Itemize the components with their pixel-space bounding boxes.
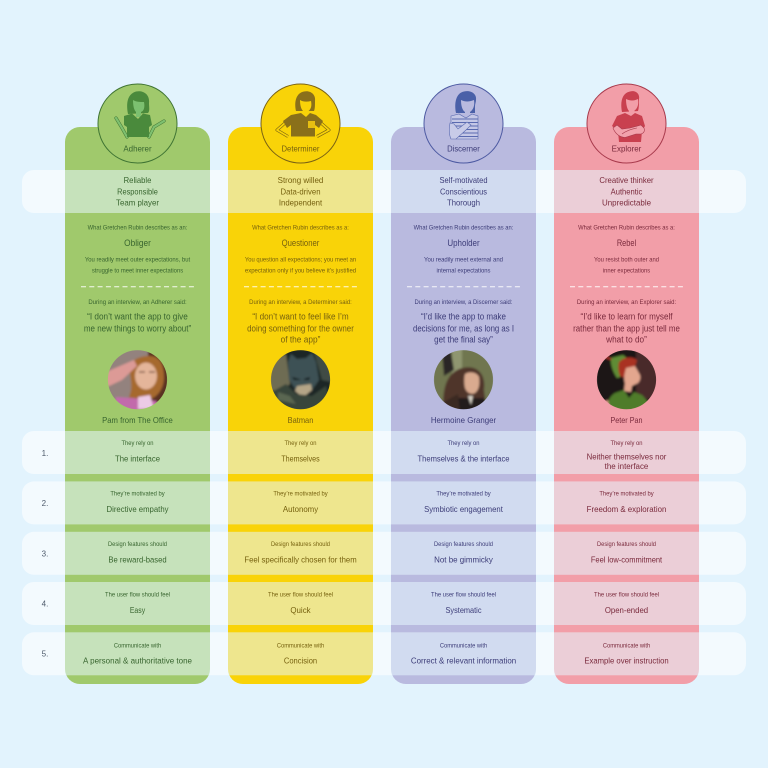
label: Hermoine Granger: Hermoine Granger <box>431 415 496 425</box>
row 1 text: the interface <box>605 461 649 471</box>
traits: Self-motivated <box>440 175 488 185</box>
photo: Hermione Granger <box>433 349 494 412</box>
row 5 text: A personal & authoritative tone <box>83 656 192 666</box>
lighter rows <box>391 170 536 675</box>
row 1 text: The interface <box>115 453 160 463</box>
row 1 text: They rely on <box>122 441 154 447</box>
interview quote <box>84 300 191 333</box>
traits <box>278 175 324 208</box>
tendency description: Rebel <box>617 238 636 248</box>
row 4 text <box>105 593 170 615</box>
row 5 text: Correct & relevant information <box>411 656 516 666</box>
row 1 text: Neither themselves nor <box>587 451 666 461</box>
interview quote: what to do” <box>605 335 647 345</box>
horizontal bands behind the columns <box>22 170 746 675</box>
traits: Independent <box>279 198 323 208</box>
panel: Explorer <box>554 84 699 684</box>
row 4 text: The user flow should feel <box>268 593 333 599</box>
icon: Determiner hands on hips figure in circle <box>261 84 340 163</box>
panel: Discerner <box>391 84 536 684</box>
row 2 text: They’re motivated by <box>436 492 491 498</box>
tendency description: Questioner <box>282 238 319 248</box>
label: Peter Pan: Peter Pan <box>610 415 643 425</box>
row 4 text: The user flow should feel <box>431 593 496 599</box>
row 2 text: They’re motivated by <box>110 492 165 498</box>
tendency description: What Gretchen Rubin describes as a: <box>578 226 675 232</box>
tendency description: Obliger <box>124 238 151 248</box>
row 4 text <box>594 593 659 615</box>
column background <box>554 127 699 684</box>
row 4 text: Open-ended <box>605 605 648 615</box>
interview quote: doing something for the owner <box>247 323 354 333</box>
row 2 text <box>273 492 328 514</box>
column background <box>228 127 373 684</box>
traits: Data-driven <box>280 186 321 196</box>
tendency description: What Gretchen Rubin describes as a: <box>252 226 349 232</box>
tendency description: You readily meet external and <box>424 257 503 263</box>
row 3 text: Design features should <box>434 542 493 548</box>
row 1 text: Themselves & the interface <box>418 453 510 463</box>
interview quote: get the final say” <box>434 335 493 345</box>
row 3 text <box>244 542 357 564</box>
row numbers <box>42 449 48 659</box>
interview quote: During an interview, an Adherer said: <box>88 300 187 306</box>
row 5 text <box>83 643 192 666</box>
photo: Peter Pan <box>596 350 656 410</box>
row numbers: 2. <box>42 499 48 508</box>
tendency description <box>245 226 356 275</box>
tendency description: What Gretchen Rubin describes as an: <box>88 226 188 232</box>
traits: Reliable <box>124 175 152 185</box>
interview quote: “I don’t want to feel like I’m <box>252 312 349 322</box>
row 3 text <box>591 542 663 564</box>
tendency description <box>578 226 675 275</box>
row numbers: 5. <box>42 650 48 659</box>
interview quote <box>573 300 680 345</box>
row 3 text: Design features should <box>597 542 656 548</box>
tendency description: You resist both outer and <box>594 257 659 263</box>
tendency description: You question all expectations; you meet an <box>245 257 356 263</box>
row 4 text: The user flow should feel <box>594 593 659 599</box>
row 2 text: They’re motivated by <box>273 492 328 498</box>
interview quote: me new things to worry about” <box>84 323 191 333</box>
label: Discerner: Discerner <box>447 144 480 154</box>
lighter rows <box>554 170 699 675</box>
row 1 text <box>587 441 666 471</box>
tendency description: What Gretchen Rubin describes as an: <box>414 226 514 232</box>
tendency description: Upholder <box>447 238 480 248</box>
interview quote: During an interview, a Determiner said: <box>249 300 352 306</box>
traits: Strong willed <box>278 175 324 185</box>
row 3 text <box>108 542 167 564</box>
row 3 text: Design features should <box>271 542 330 548</box>
column background <box>391 127 536 684</box>
label: Pam from The Office: Pam from The Office <box>102 415 173 425</box>
interview quote: “I’d like to learn for myself <box>580 312 673 322</box>
tendency description <box>414 226 514 275</box>
label: Determiner: Determiner <box>282 144 320 154</box>
interview quote: “I don’t want the app to give <box>87 312 188 322</box>
row 5 text: Communicate with <box>603 643 650 649</box>
row 3 text: Feel specifically chosen for them <box>244 554 357 564</box>
traits: Conscientious <box>440 186 487 196</box>
traits: Team player <box>116 198 159 208</box>
row 4 text: Easy <box>130 605 146 615</box>
interview quote: decisions for me, as long as I <box>413 323 514 333</box>
interview quote <box>247 300 354 345</box>
row 2 text: Autonomy <box>283 504 319 514</box>
row 5 text <box>277 643 324 666</box>
panel: Determiner <box>228 84 373 684</box>
row 1 text <box>115 441 160 463</box>
row 3 text: Feel low-commitment <box>591 554 663 564</box>
row 5 text <box>411 643 516 666</box>
interview quote: of the app” <box>281 335 320 345</box>
tendency description: struggle to meet inner expectations <box>92 269 183 275</box>
traits <box>599 175 654 208</box>
lighter rows <box>65 170 210 675</box>
panel: Adherer <box>65 84 210 684</box>
label: Adherer: Adherer <box>123 144 152 154</box>
icon: Adherer shrugging figure in circle <box>98 84 177 163</box>
column background <box>65 127 210 684</box>
row 5 text: Communicate with <box>277 643 324 649</box>
row 1 text: Themselves <box>281 453 320 463</box>
photo: Pam from The Office <box>106 349 168 412</box>
row 2 text: Directive empathy <box>106 504 169 514</box>
lighter rows <box>228 170 373 675</box>
interview quote: During an interview, an Explorer said: <box>577 300 676 306</box>
tendency description: inner expectations <box>603 269 650 275</box>
row 5 text: Communicate with <box>114 643 161 649</box>
row 4 text <box>268 593 333 615</box>
tendency description: expectation only if you believe it’s justified <box>245 269 356 275</box>
traits: Responsible <box>117 186 158 196</box>
icon: Discerner striped shirt figure in circle <box>424 84 503 163</box>
row 3 text: Design features should <box>108 542 167 548</box>
row 5 text: Communicate with <box>440 643 487 649</box>
row 1 text: They rely on <box>610 441 642 447</box>
icon: Explorer arms crossed figure in circle <box>587 84 666 163</box>
row 2 text <box>106 492 169 514</box>
row 5 text <box>584 643 669 666</box>
interview quote: rather than the app just tell me <box>573 323 680 333</box>
interview quote <box>413 300 514 345</box>
row 1 text <box>281 441 320 463</box>
row 4 text: Quick <box>290 605 311 615</box>
row 2 text <box>424 492 503 514</box>
traits: Unpredictable <box>602 198 651 208</box>
traits <box>440 175 488 208</box>
interview quote: “I’d like the app to make <box>421 312 506 322</box>
traits: Creative thinker <box>599 175 654 185</box>
photo: Batman <box>270 349 332 412</box>
traits: Thorough <box>447 198 480 208</box>
row numbers: 1. <box>42 449 48 458</box>
row numbers: 3. <box>42 550 48 559</box>
traits <box>116 175 159 208</box>
tendency description <box>85 226 190 275</box>
row 2 text <box>587 492 667 514</box>
tendency description: You readily meet outer expectations, but <box>85 257 190 263</box>
label: Batman: Batman <box>288 415 314 425</box>
row 3 text: Not be gimmicky <box>434 554 493 564</box>
tendency description: internal expectations <box>436 269 490 275</box>
interview quote: During an interview, a Discerner said: <box>414 300 513 306</box>
row 4 text <box>431 593 496 615</box>
row 3 text: Be reward-based <box>108 554 167 564</box>
row 5 text: Concision <box>284 656 317 666</box>
label: Explorer: Explorer <box>612 144 642 154</box>
row 5 text: Example over instruction <box>584 656 669 666</box>
row 1 text: They rely on <box>448 441 480 447</box>
traits: Authentic <box>611 186 642 196</box>
row numbers: 4. <box>42 600 48 609</box>
row 2 text: They’re motivated by <box>599 492 654 498</box>
row 4 text: Systematic <box>446 605 482 615</box>
row 4 text: The user flow should feel <box>105 593 170 599</box>
row 1 text <box>418 441 510 463</box>
row 3 text <box>434 542 493 564</box>
row 2 text: Symbiotic engagement <box>424 504 503 514</box>
row 1 text: They rely on <box>284 441 316 447</box>
row 2 text: Freedom & exploration <box>587 504 667 514</box>
